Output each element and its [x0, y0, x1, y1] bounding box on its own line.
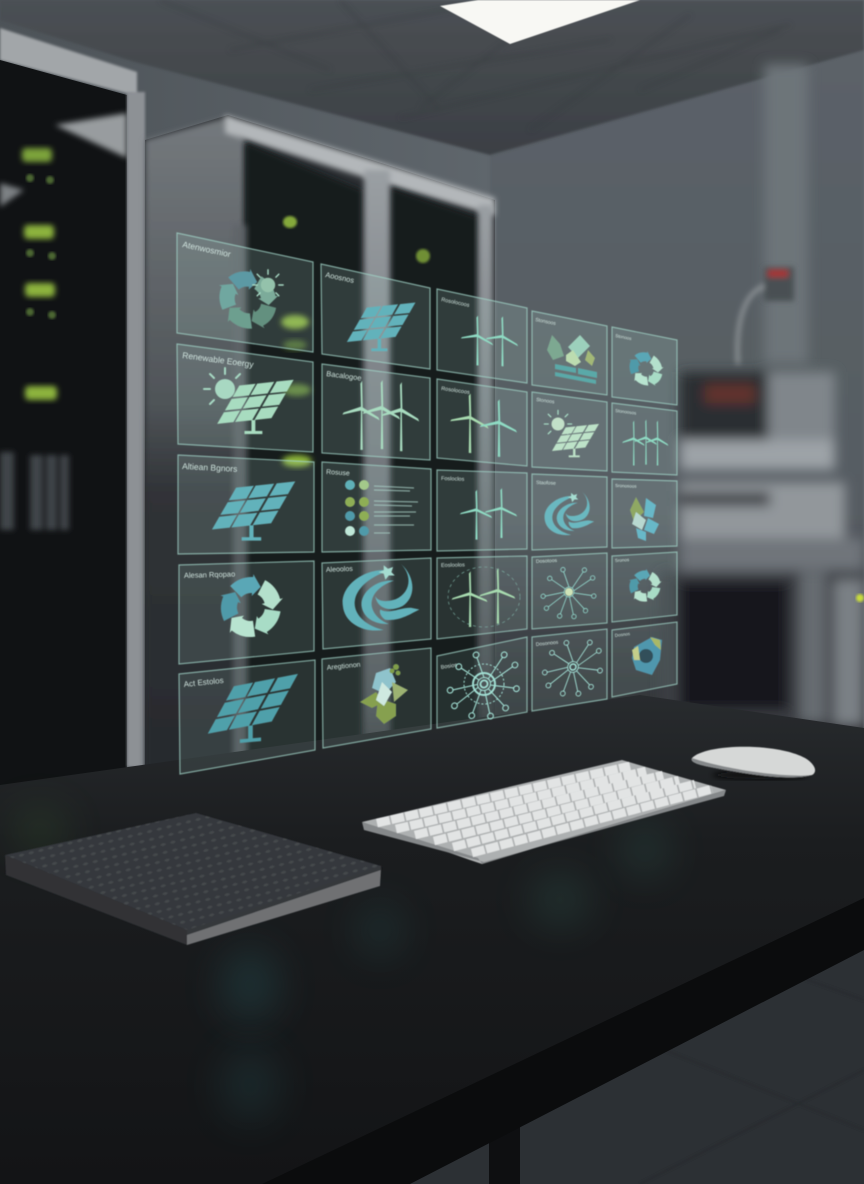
panel row 2 column 4 — [532, 392, 607, 471]
background room — [0, 0, 864, 805]
panel row 1 column 3: Rosolocoos — [441, 297, 470, 309]
panel row 1 column 1: Atenwosmior — [182, 239, 232, 259]
panel row 2 column 5 — [612, 403, 677, 475]
panel row 4 column 4 — [532, 553, 607, 629]
panel row 3 column 3 — [437, 470, 527, 551]
back wall — [0, 0, 864, 800]
panel row 2 column 1 — [177, 344, 313, 452]
panel row 5 column 3: Bosios — [440, 662, 458, 671]
panel row 1 column 2: Aoosnos — [325, 270, 355, 285]
panel row 4 column 5: Sronos — [615, 557, 630, 563]
panel row 5 column 2 — [322, 648, 431, 748]
panel row 5 column 5 — [612, 622, 677, 697]
panel row 1 column 4 — [532, 311, 607, 395]
panel row 2 column 4: Stonoos — [536, 397, 555, 405]
wall column — [764, 64, 808, 364]
panel row 3 column 2: Rosuse — [326, 469, 350, 477]
icon: mosaic with leaves — [360, 664, 408, 724]
panel row 1 column 2 — [321, 264, 430, 369]
panel row 5 column 4 — [532, 629, 607, 711]
icon: dot list — [345, 480, 418, 536]
table leg — [489, 1125, 520, 1184]
panel row 3 column 2 — [322, 462, 431, 552]
panel row 4 column 2: Aleoolos — [326, 566, 353, 574]
desk front edge — [262, 898, 864, 1184]
icon: mosaic — [630, 497, 659, 541]
panel row 1 column 3 — [437, 289, 527, 383]
panel row 2 column 1: Renewable Eoergy — [182, 350, 255, 369]
right equipment stack — [660, 372, 864, 727]
panel row 2 column 3: Rosolocoos — [441, 386, 470, 396]
panel row 5 column 1 — [179, 660, 315, 774]
panel row 4 column 1: Alesan Rqopao — [184, 569, 235, 580]
panel row 5 column 1: Act Estolos — [183, 676, 224, 689]
panel row 5 column 2: Aregtionon — [326, 662, 361, 672]
panel row 2 column 2: Bacalogoe — [326, 369, 362, 383]
panel row 4 column 1 — [179, 561, 314, 664]
panel row 4 column 4: Dosotoos — [536, 558, 558, 565]
dashed orbit — [448, 567, 520, 627]
panel row 4 column 3 — [437, 556, 527, 639]
desk surface — [0, 695, 864, 1184]
panel row 2 column 2 — [322, 364, 430, 460]
right wall section — [490, 45, 864, 800]
icon: mosaic with slats — [547, 335, 597, 384]
wall socket with cable — [737, 267, 794, 365]
panel row 3 column 3: Fosloclos — [441, 476, 465, 483]
icon: globe blob — [632, 637, 662, 675]
panel row 3 column 4 — [532, 474, 607, 550]
panel row 3 column 5 — [612, 479, 677, 548]
panel row 4 column 2 — [322, 558, 431, 649]
panel reflections on desk — [222, 949, 278, 1021]
left server rack — [0, 28, 145, 790]
panel row 3 column 5: Sronosoos — [615, 483, 637, 489]
status light — [856, 594, 864, 602]
panel row 3 column 4: Staofose — [536, 480, 556, 487]
floor — [400, 940, 864, 1184]
rack drive bays — [0, 452, 69, 530]
panel row 3 column 1: Altiean Bgnors — [182, 461, 238, 474]
panel row 4 column 5 — [612, 552, 677, 622]
panel row 4 column 3: Eosloolos — [441, 562, 465, 569]
panel row 5 column 5: Dosnos — [615, 631, 631, 638]
notebook — [5, 813, 382, 945]
panel row 5 column 4: Dosonoos — [536, 640, 559, 648]
central server racks — [145, 115, 495, 805]
panel row 5 column 3 — [437, 637, 527, 728]
panel row 1 column 4: Stonsoos — [535, 317, 557, 327]
panel row 3 column 1 — [178, 455, 314, 554]
panel row 1 column 5: Stonoos — [615, 333, 633, 341]
ceiling — [0, 0, 864, 155]
ceiling light — [440, 0, 640, 44]
keyboard — [362, 760, 726, 864]
panel row 2 column 3 — [437, 379, 527, 466]
holographic panels — [177, 233, 677, 774]
panel row 1 column 5 — [612, 327, 677, 405]
panel row 1 column 1 — [177, 233, 313, 352]
mouse — [692, 747, 815, 779]
panel row 2 column 5: Stonoosos — [615, 408, 637, 416]
